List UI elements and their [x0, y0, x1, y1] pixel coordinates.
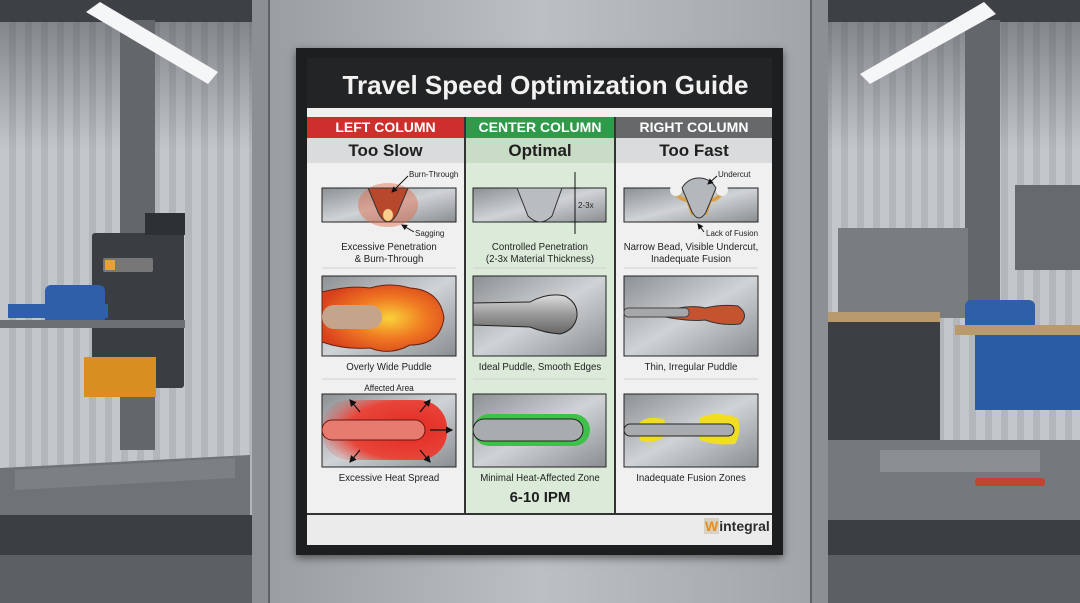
column header: center: CENTER COLUMN: [479, 119, 601, 135]
poster: [296, 48, 783, 555]
captions: Excessive Penetration: [341, 241, 437, 253]
diagram: undercut: Lack of Fusion: [706, 229, 758, 238]
subheader: too fast: Too Fast: [659, 141, 729, 160]
yellow box: [84, 357, 156, 397]
subheader: optimal: Optimal: [508, 141, 572, 160]
text: (2-3x Material Thickness): [486, 253, 594, 265]
logo: Wintegral: [705, 518, 770, 534]
text: Thin, Irregular Puddle: [645, 361, 737, 373]
text: Minimal Heat-Affected Zone: [480, 472, 600, 484]
text: Narrow Bead, Visible Undercut,: [624, 241, 758, 253]
text: Inadequate Fusion Zones: [636, 472, 746, 484]
image: minimal HAZ: [473, 394, 606, 467]
right cabinets: [838, 228, 968, 318]
diagram: burn-through cross section: Burn-Through: [409, 170, 458, 179]
text: Overly Wide Puddle: [346, 361, 432, 373]
image: thin puddle: [624, 276, 758, 356]
captions: [341, 241, 437, 265]
text: Ideal Puddle, Smooth Edges: [479, 361, 601, 373]
column header: left: LEFT COLUMN: [335, 119, 436, 135]
column header: center: [466, 117, 614, 138]
text: Affected Area: [364, 383, 414, 393]
diagram: burn-through cross section: Sagging: [415, 229, 444, 238]
vise left: [8, 304, 108, 318]
footer: [307, 513, 772, 545]
title: Travel Speed Optimization Guide: [342, 70, 748, 100]
speed range: 6-10 IPM: [510, 489, 570, 506]
text: Inadequate Fusion: [651, 253, 731, 265]
image: inadequate fusion: [624, 394, 758, 467]
image: overly wide puddle: [322, 276, 456, 356]
text: Excessive Heat Spread: [339, 472, 439, 484]
diagram: burn-through cross section: [322, 170, 458, 238]
subheader: too slow: [307, 138, 464, 163]
central metal panel: [252, 0, 828, 603]
diagram: controlled penetration: 2-3x: [578, 201, 594, 210]
subheader: optimal: [466, 138, 614, 163]
subheader: too slow: Too Slow: [348, 141, 423, 160]
diagram: controlled penetration: [473, 172, 606, 234]
text: Controlled Penetration: [492, 241, 588, 253]
captions: & Burn-Through: [355, 253, 423, 265]
row separators: [322, 268, 758, 379]
image: ideal puddle: [473, 276, 606, 356]
title: [307, 58, 772, 108]
welder: [92, 233, 184, 388]
image: heat spread: [322, 394, 456, 467]
diagram: undercut: [624, 170, 758, 238]
column header: left: [307, 117, 464, 138]
lights: [86, 2, 218, 84]
right table: [828, 440, 1080, 520]
subheader: too fast: [616, 138, 772, 163]
column backgrounds: [465, 138, 615, 513]
left table: [0, 320, 185, 328]
diagram: undercut: Undercut: [718, 170, 751, 179]
column header: right: RIGHT COLUMN: [640, 119, 748, 135]
column header: right: [616, 117, 772, 138]
